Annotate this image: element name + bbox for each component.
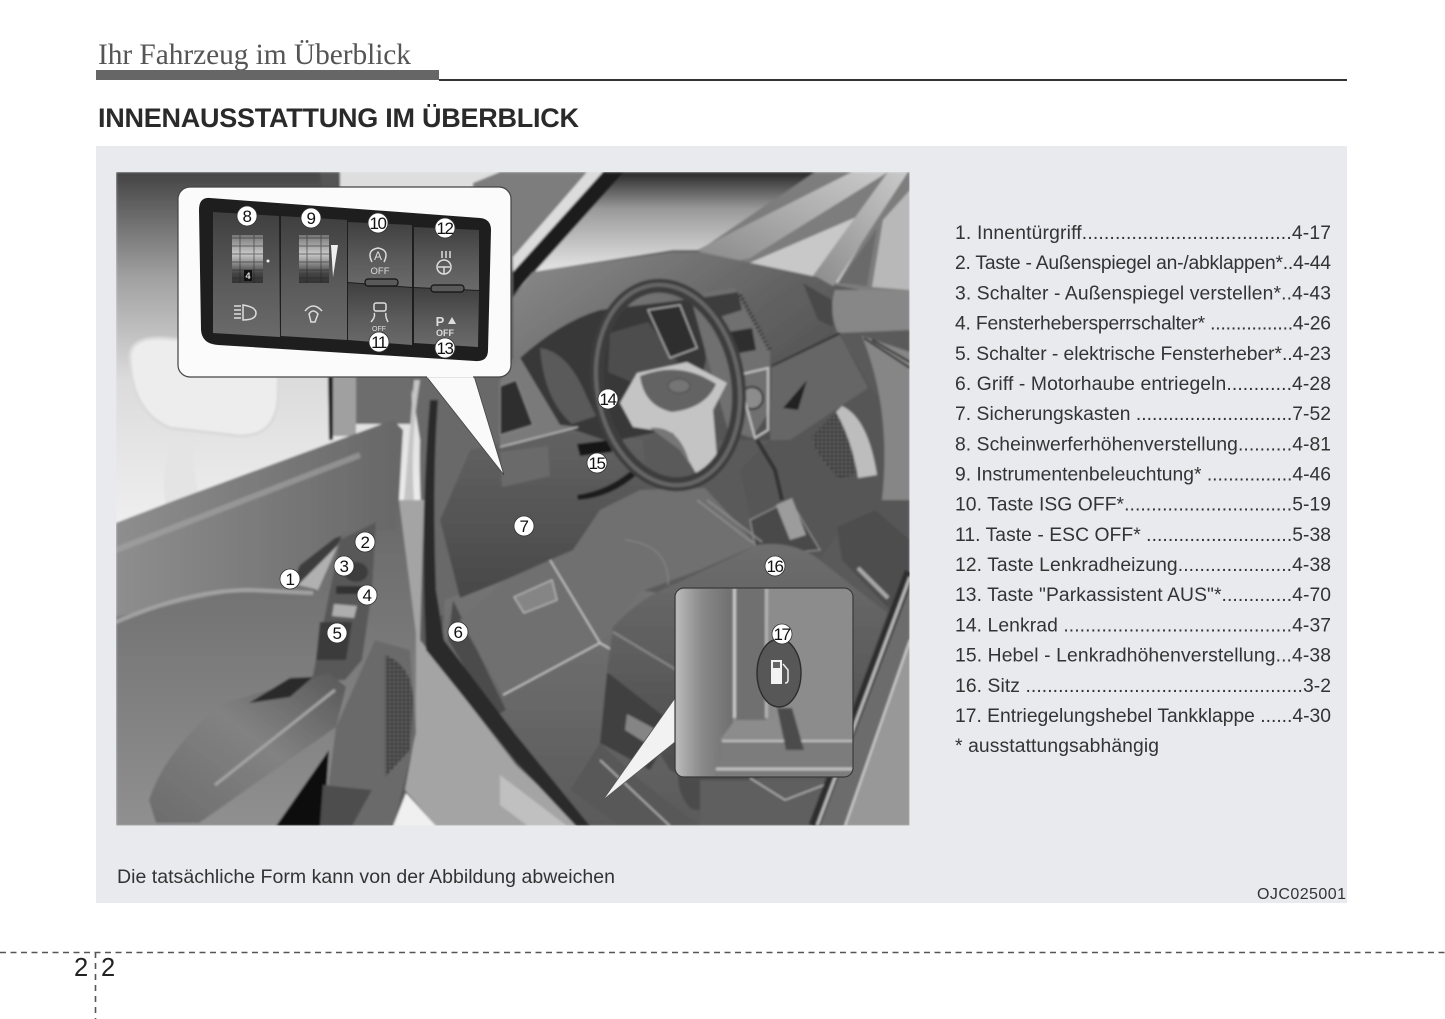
wheel hub <box>620 362 727 475</box>
icon: fuel pump lever <box>757 639 801 707</box>
number markers: 1 <box>286 570 295 589</box>
exterior mirror <box>130 338 278 436</box>
number markers: 3 <box>340 557 349 576</box>
parts list: 16. Sitz ...................................................3-2 <box>955 676 1331 697</box>
door speaker texture <box>385 655 413 777</box>
number markers: 13 <box>437 339 453 358</box>
seat rail and foot <box>594 744 611 756</box>
parts list: * ausstattungsabhängig <box>955 736 1159 757</box>
number markers: 7 <box>520 517 529 536</box>
windshield <box>513 172 815 296</box>
number markers: 12 <box>437 219 453 238</box>
parts list: 7. Sicherungskasten .............................7-52 <box>955 404 1331 425</box>
parts list: 2. Taste - Außenspiegel an-/abklappen*..4-44 <box>955 253 1331 274</box>
parts list: 14. Lenkrad ..........................................4-37 <box>955 615 1331 636</box>
panel: overview <box>96 146 1347 903</box>
switch block and slots <box>500 446 550 487</box>
number markers: 17 <box>774 625 790 644</box>
right door frame <box>845 640 910 826</box>
number markers: 8 <box>243 207 252 226</box>
lower left dash and vent <box>500 376 575 446</box>
caption: Die tatsächliche Form kann von der Abbildung abweichen <box>117 866 615 888</box>
switch panel body <box>199 198 491 361</box>
right side window area <box>717 172 910 290</box>
cluster opening <box>520 298 706 442</box>
number markers <box>237 206 792 644</box>
number markers: 11 <box>371 333 387 352</box>
parts list: 10. Taste ISG OFF*...............................5-19 <box>955 495 1331 516</box>
section title: Ihr Fahrzeug im Überblick <box>98 39 411 71</box>
header rule <box>96 70 1347 81</box>
page number: 2 <box>74 954 88 982</box>
door panel <box>116 420 416 826</box>
callout: dashboard switches <box>178 187 511 475</box>
parts list: 13. Taste "Parkassistent AUS"*.............4-70 <box>955 585 1331 606</box>
number markers: 4 <box>363 586 372 605</box>
callout: dashboard switches: A <box>374 249 382 263</box>
left floor mat <box>442 582 655 756</box>
number markers: 16 <box>767 557 783 576</box>
center carpet <box>552 488 754 626</box>
number markers: 9 <box>307 209 316 228</box>
switch panel <box>312 522 376 680</box>
driver seat <box>607 544 887 800</box>
console and shifter <box>748 506 822 553</box>
door pocket dark <box>276 750 329 826</box>
door sill and seal <box>399 500 582 826</box>
callout: dashboard switches: OFF <box>370 266 390 277</box>
callout: dashboard switches: OFF <box>372 326 386 333</box>
left window view <box>116 172 436 532</box>
number markers: 5 <box>333 624 342 643</box>
callout: fuel release detail <box>603 588 853 800</box>
steering wheel <box>606 278 748 492</box>
number markers: 15 <box>589 454 605 473</box>
parts list: 12. Taste Lenkradheizung.....................4-38 <box>955 555 1331 576</box>
number markers: 14 <box>600 390 616 409</box>
parts list: 1. Innentürgriff......................................4-17 <box>955 223 1331 244</box>
illustration: car interior <box>116 172 910 826</box>
knee panel <box>440 432 583 598</box>
main heading: INNENAUSSTATTUNG IM ÜBERBLICK <box>98 103 580 133</box>
page footer marks <box>0 952 1445 1019</box>
dash end and right door <box>832 290 910 333</box>
number markers: 10 <box>370 214 386 233</box>
callout: dashboard switches: 4 <box>245 271 251 281</box>
parts list: 3. Schalter - Außenspiegel verstellen*..4-43 <box>955 284 1331 304</box>
switch icons <box>234 248 451 322</box>
center stack <box>690 288 770 438</box>
image code: OJC025001 <box>1257 886 1346 903</box>
page number <box>74 954 115 982</box>
callout: dashboard switches: OFF <box>436 328 454 338</box>
parts list: 8. Scheinwerferhöhenverstellung..........4-81 <box>955 434 1331 455</box>
center vent <box>648 305 697 358</box>
parts list: 9. Instrumentenbeleuchtung* ................4-46 <box>955 464 1331 486</box>
parts list: 17. Entriegelungshebel Tankklappe ......4-30 <box>955 706 1331 727</box>
door armrest <box>149 673 346 823</box>
callout: dashboard switches: P <box>436 314 445 329</box>
parts list: 6. Griff - Motorhaube entriegeln............4-28 <box>955 374 1331 395</box>
number markers: 2 <box>361 533 370 552</box>
dashboard body <box>500 252 840 447</box>
parts list: 11. Taste - ESC OFF* ...........................5-38 <box>955 525 1331 546</box>
roof edge and A pillar <box>472 172 588 274</box>
pedal <box>514 580 557 613</box>
page number: 2 <box>101 954 115 982</box>
number markers: 6 <box>454 623 463 642</box>
parts list: 5. Schalter - elektrische Fensterheber*..4-23 <box>955 344 1331 365</box>
B pillar stub <box>328 376 333 440</box>
parts list: 15. Hebel - Lenkradhöhenverstellung...4-38 <box>955 646 1331 667</box>
door handle recess <box>296 536 342 585</box>
right seat and handbrake <box>837 510 910 612</box>
parts list <box>955 223 1331 757</box>
kick panel <box>410 378 501 616</box>
parts list: 4. Fensterhebersperrschalter* ................4-26 <box>955 314 1331 334</box>
windshield pillars <box>697 172 888 264</box>
passenger door speaker and handle <box>814 414 856 478</box>
